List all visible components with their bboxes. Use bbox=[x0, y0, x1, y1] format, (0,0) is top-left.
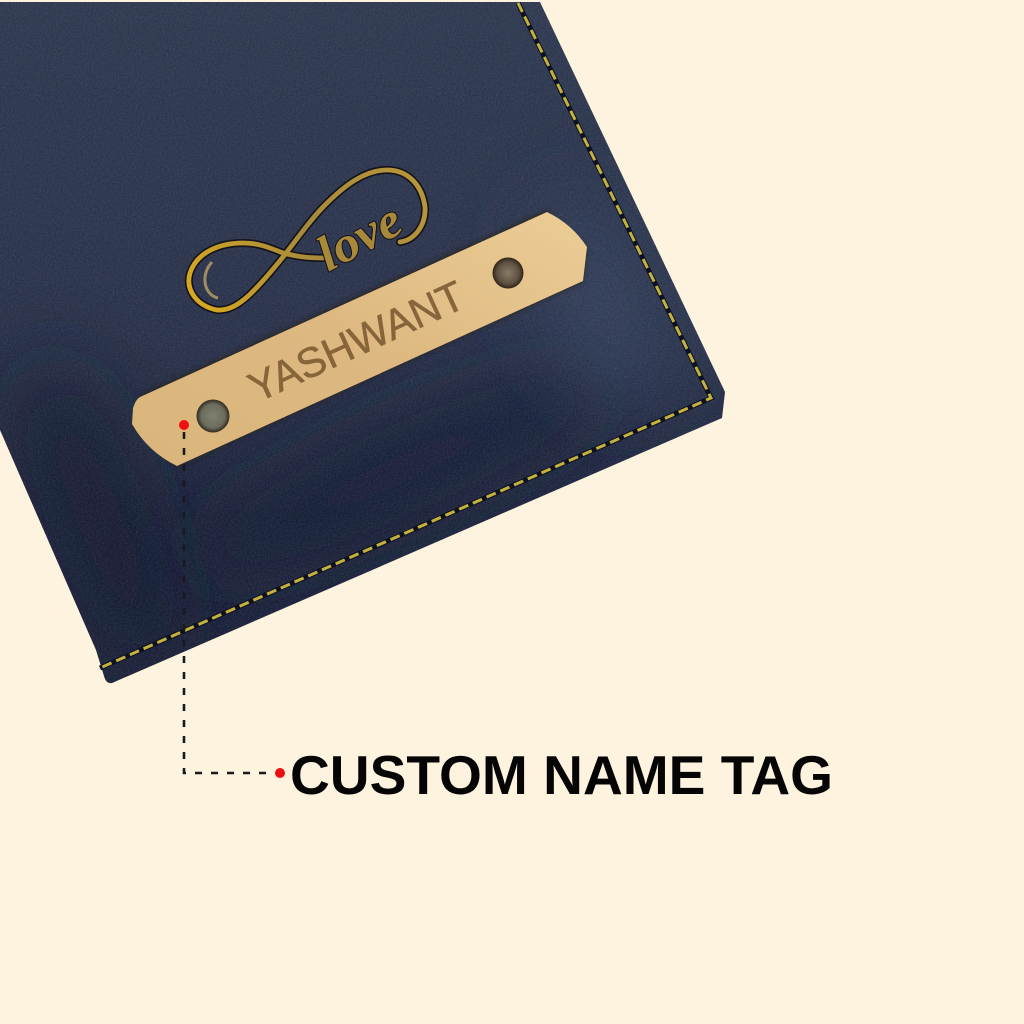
right rivet bbox=[492, 258, 524, 288]
wallet bbox=[0, 0, 730, 696]
infinity love charm bbox=[189, 170, 425, 310]
stitching bbox=[100, 3, 711, 668]
callout label: CUSTOM NAME TAG bbox=[290, 744, 833, 806]
engraved name: YASHWANT bbox=[241, 272, 472, 411]
product illustration and callout bbox=[0, 2, 830, 794]
callout leader line bbox=[179, 420, 285, 778]
red dot at label bbox=[275, 768, 285, 778]
leather shading bbox=[0, 0, 730, 696]
tag plate bbox=[132, 212, 587, 466]
red dot on tag bbox=[179, 420, 189, 430]
wallet body bbox=[0, 2, 725, 683]
name tag bbox=[132, 210, 587, 467]
left rivet bbox=[196, 400, 230, 432]
charm word: love bbox=[307, 191, 411, 282]
